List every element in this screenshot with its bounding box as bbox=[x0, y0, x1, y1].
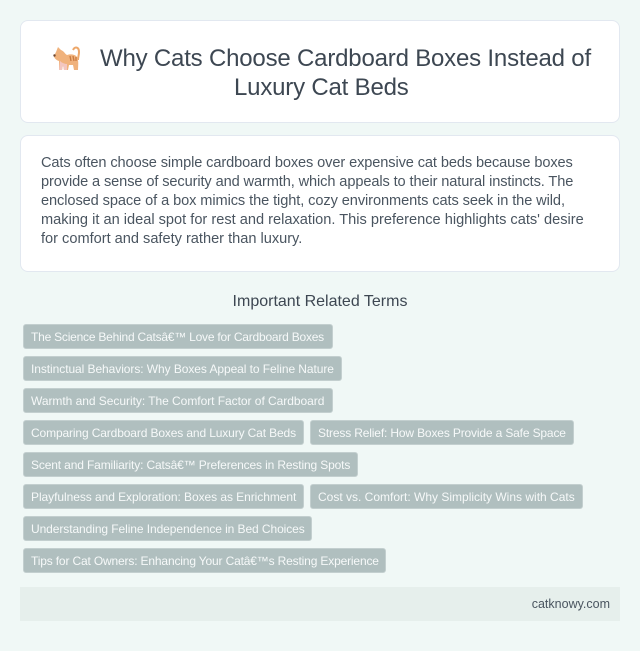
tag 9 bbox=[23, 516, 312, 541]
tag list bbox=[23, 324, 583, 573]
tag 7 bbox=[23, 484, 304, 509]
footer bar bbox=[20, 587, 620, 621]
tag 4: Comparing Cardboard Boxes and Luxury Cat Beds bbox=[31, 426, 296, 440]
description text: making it an ideal spot for rest and relaxation. This preference highlights cats' desire bbox=[41, 212, 584, 228]
description text: provide a sense of security and warmth, which appeals to their natural instincts. The bbox=[41, 174, 573, 190]
tag 1 bbox=[23, 324, 333, 349]
tag 10: Tips for Cat Owners: Enhancing Your Catâ€™s Resting Experience bbox=[31, 554, 379, 568]
description text: enclosed space of a box mimics the tight, cozy environments cats seek in the wild, bbox=[41, 193, 565, 209]
tag 9: Understanding Feline Independence in Bed Choices bbox=[31, 522, 305, 536]
tag 8 bbox=[310, 484, 583, 509]
tag 2 bbox=[23, 356, 342, 381]
description text bbox=[41, 155, 584, 247]
tag 3 bbox=[23, 388, 333, 413]
tag 5 bbox=[310, 420, 574, 445]
icon: cat bbox=[53, 46, 80, 70]
tag 10 bbox=[23, 548, 386, 573]
heading: related terms: Important Related Terms bbox=[233, 293, 407, 310]
heading line 2: Luxury Cat Beds bbox=[234, 74, 409, 101]
heading line 1: Why Cats Choose Cardboard Boxes Instead of bbox=[100, 45, 591, 72]
tag 6: Scent and Familiarity: Catsâ€™ Preferences in Resting Spots bbox=[31, 458, 350, 472]
tag 2: Instinctual Behaviors: Why Boxes Appeal to Feline Nature bbox=[31, 362, 334, 376]
description text: Cats often choose simple cardboard boxes over expensive cat beds because boxes bbox=[41, 155, 573, 171]
tag 3: Warmth and Security: The Comfort Factor of Cardboard bbox=[31, 394, 324, 408]
tag 6 bbox=[23, 452, 358, 477]
footer site name: catknowy.com bbox=[532, 597, 610, 611]
tag 8: Cost vs. Comfort: Why Simplicity Wins with Cats bbox=[318, 490, 575, 504]
description text: for comfort and safety rather than luxury. bbox=[41, 231, 302, 247]
panel: title card bbox=[20, 20, 620, 123]
tag 5: Stress Relief: How Boxes Provide a Safe Space bbox=[318, 426, 566, 440]
panel: description card bbox=[20, 135, 620, 272]
tag 1: The Science Behind Catsâ€™ Love for Cardboard Boxes bbox=[31, 330, 324, 344]
tag 4 bbox=[23, 420, 304, 445]
tag 7: Playfulness and Exploration: Boxes as Enrichment bbox=[31, 490, 296, 504]
